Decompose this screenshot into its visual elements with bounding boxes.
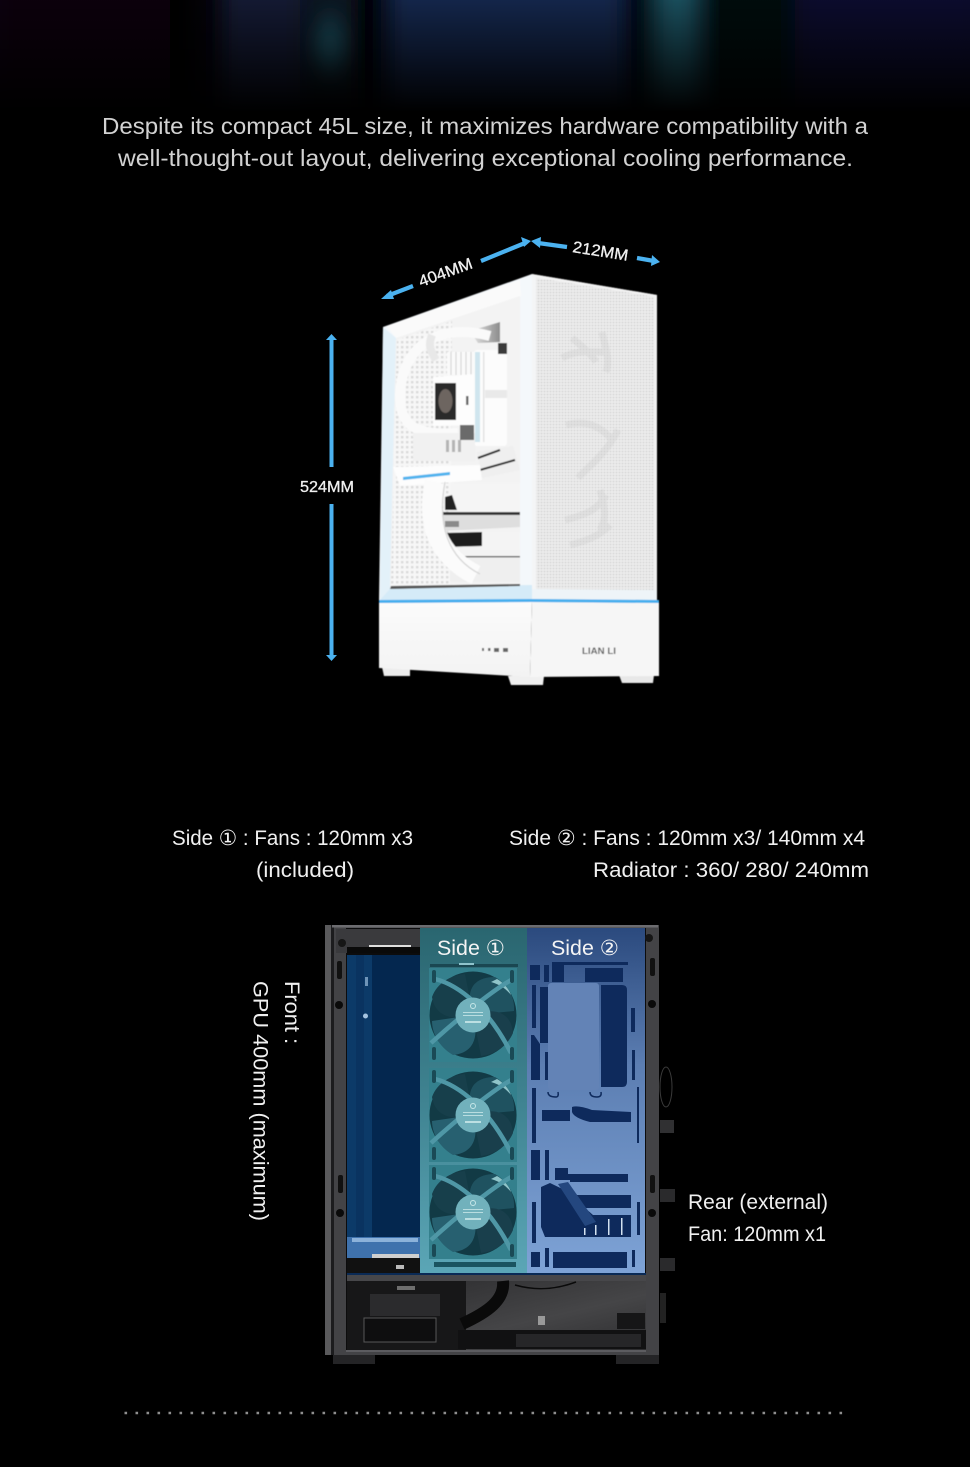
white cable bundle <box>432 482 476 575</box>
label: rear external fan: Fan: 120mm x1 <box>688 1223 826 1246</box>
intro text: Despite its compact 45L size, it maximizes hardware compatibility with a <box>102 113 868 139</box>
fan 1 <box>429 968 517 1062</box>
label: Side 1 fans: (included) <box>256 859 354 882</box>
Side 2 label: Side ② <box>551 937 619 960</box>
GPU <box>443 483 520 582</box>
logo: LIAN LI <box>582 646 616 657</box>
Side 1 teal zone with fans <box>420 928 527 1273</box>
front mesh panel <box>532 274 657 601</box>
front IO ports <box>482 648 508 652</box>
dimension: 524MM <box>300 334 354 661</box>
RAM fins <box>447 352 476 375</box>
chassis frame <box>325 925 659 1364</box>
side glass panel <box>379 274 532 601</box>
lower PSU chamber <box>346 1273 646 1352</box>
teal glow <box>313 18 347 74</box>
CPU block with display <box>433 374 475 426</box>
label: Side 1 fans <box>172 827 413 882</box>
label: front GPU clearance <box>248 981 303 1221</box>
label: Side 2 fans and radiator: Side ② : Fans : 120mm x3/ 140mm x4 <box>509 827 865 850</box>
label: Side 1 fans: Side ① : Fans : 120mm x3 <box>172 827 413 850</box>
dimension: 404MM: 404MM <box>417 256 475 291</box>
Side 1 label: Side ① <box>437 937 505 960</box>
board connector <box>393 446 520 486</box>
cyan light bar <box>379 599 659 603</box>
chassis diagram <box>325 925 675 1364</box>
label: rear external fan: Rear (external) <box>688 1191 828 1214</box>
fan 2 <box>429 1068 517 1162</box>
dimension: 404MM <box>381 237 531 299</box>
intro text: well-thought-out layout, delivering exceptional cooling performance. <box>117 145 853 171</box>
dotted divider <box>124 1412 847 1414</box>
AIO tubes <box>400 332 490 433</box>
label: front GPU clearance: Front : <box>280 981 303 1044</box>
VRM <box>413 425 475 461</box>
rear external hardware <box>660 1067 675 1323</box>
intro text <box>102 113 868 171</box>
case base <box>379 601 659 685</box>
Side 2 blue zone with cutouts <box>527 928 645 1273</box>
label: rear external fan <box>688 1191 828 1246</box>
dimension: 212MM <box>531 237 660 266</box>
cyan lit strip <box>403 472 450 480</box>
interior <box>390 296 520 588</box>
label: front GPU clearance: GPU 400mm (maximum) <box>248 981 272 1221</box>
dimension: 524MM: 524MM <box>300 479 354 496</box>
dimension: 212MM: 212MM <box>571 239 629 265</box>
fan shadows through mesh <box>562 332 618 545</box>
pegboard <box>391 321 452 587</box>
case product image <box>379 274 659 685</box>
reservoir pump <box>474 343 507 446</box>
blurred top glow banner <box>0 0 970 130</box>
label: Side 2 fans and radiator <box>509 827 869 882</box>
GPU zone panel <box>347 955 420 1273</box>
fan 3 <box>429 1165 517 1259</box>
label: Side 2 fans and radiator: Radiator : 360/ 280/ 240mm <box>593 859 869 882</box>
